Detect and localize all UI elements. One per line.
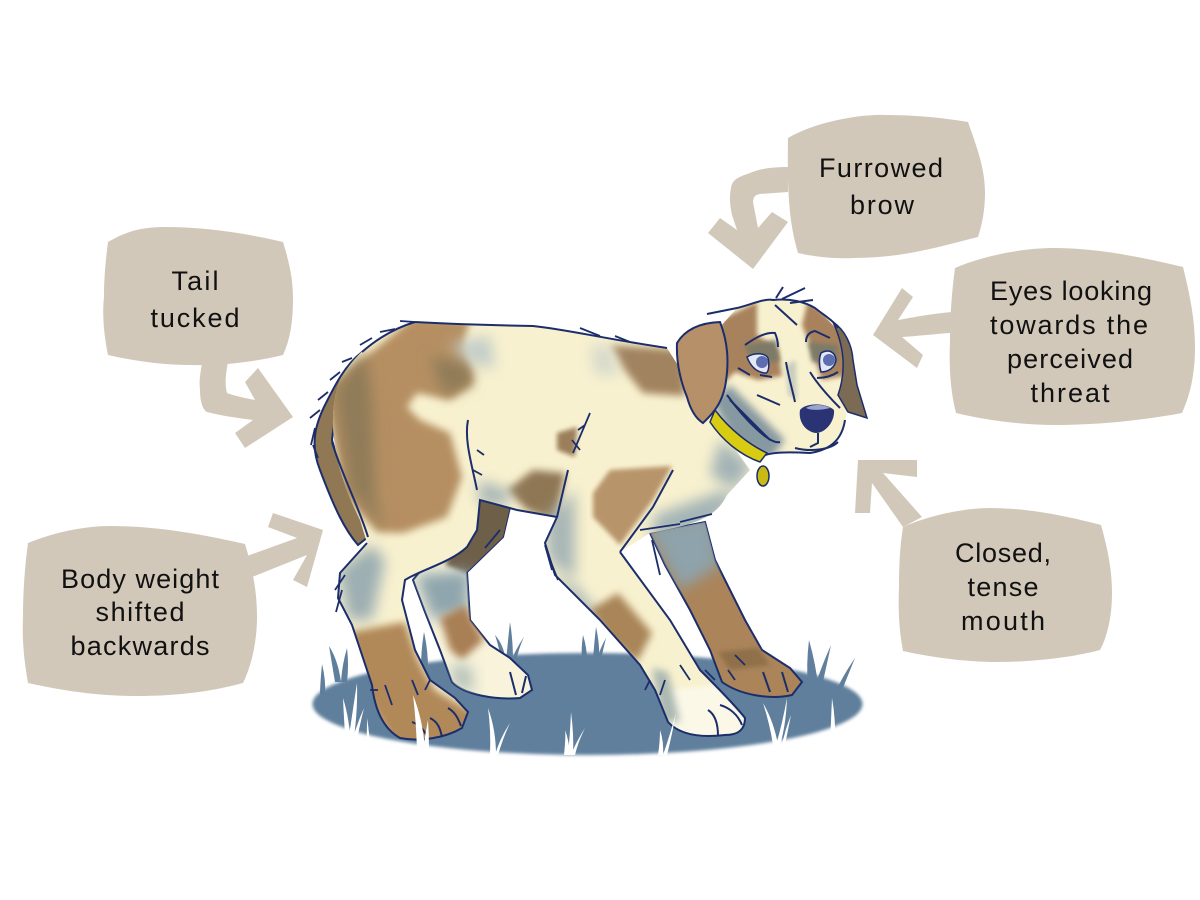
patch: belly <box>507 470 565 522</box>
patch: flank spot <box>557 427 577 457</box>
callout: tail tucked <box>103 227 293 365</box>
callout: body weight shifted backwards <box>23 526 257 696</box>
tail and rump fur <box>315 352 368 545</box>
toe lines <box>412 705 742 740</box>
right ear <box>833 322 867 418</box>
shadow: hind leg <box>338 545 385 620</box>
callout: furrowed brow <box>788 115 985 258</box>
shadow: near front paw <box>652 668 680 722</box>
callout: body weight shifted backwards: backwards <box>70 631 210 661</box>
callout: closed tense mouth: Closed, <box>955 538 1051 568</box>
left ear <box>677 322 727 423</box>
illustration: ground shadow ellipse <box>312 653 862 755</box>
arrow: mouth <box>855 460 922 527</box>
illustration: blue grass blades behind <box>320 622 855 698</box>
arrow: furrowed brow <box>708 167 788 269</box>
callout: furrowed brow: brow <box>850 190 914 220</box>
callout: furrowed brow: Furrowed <box>819 153 943 183</box>
left eye <box>747 354 769 373</box>
right eye <box>820 351 836 372</box>
infographic canvas <box>22 114 1195 758</box>
shadow: chest <box>650 490 735 540</box>
nose <box>800 404 834 433</box>
outline: body and near legs <box>332 322 745 740</box>
patch: shoulder <box>610 345 685 396</box>
arrow: tail <box>200 362 293 448</box>
callout: eyes looking towards threat: Eyes looking <box>990 276 1152 306</box>
patch: rump saddle <box>325 316 473 533</box>
arrow: eyes <box>873 288 952 368</box>
patch: near front leg <box>590 593 652 662</box>
collar <box>710 410 767 462</box>
brows and muzzle lines <box>730 331 840 440</box>
callout: closed tense mouth: mouth <box>961 606 1045 636</box>
collar tag <box>757 466 769 486</box>
callout: body weight shifted backwards: shifted <box>96 597 184 627</box>
callout: closed tense mouth: tense <box>968 572 1038 602</box>
illustration: worried dog <box>310 287 867 748</box>
patch: shoulder lower <box>593 466 672 545</box>
fur tufts <box>310 321 745 705</box>
callout: eyes looking towards threat: perceived <box>1007 344 1133 374</box>
callout: eyes looking towards threat <box>950 248 1195 425</box>
patch: near hind leg lower <box>354 618 467 739</box>
mouth <box>795 433 838 450</box>
callout: eyes looking towards threat: towards the <box>990 310 1148 340</box>
near front paw <box>669 684 744 735</box>
far front leg <box>645 515 802 697</box>
head <box>677 287 867 486</box>
callout: tail tucked: tucked <box>150 303 240 333</box>
body, near legs <box>310 316 752 748</box>
callout: closed tense mouth <box>899 508 1112 662</box>
arrow: body weight <box>247 513 323 587</box>
illustration: white grass blades in front <box>343 683 835 755</box>
head outline <box>707 287 845 455</box>
far hind leg <box>413 495 532 698</box>
callout: tail tucked: Tail <box>172 266 218 296</box>
callout: eyes looking towards threat: threat <box>1030 378 1110 408</box>
callout: body weight shifted backwards: Body weight <box>61 564 219 594</box>
